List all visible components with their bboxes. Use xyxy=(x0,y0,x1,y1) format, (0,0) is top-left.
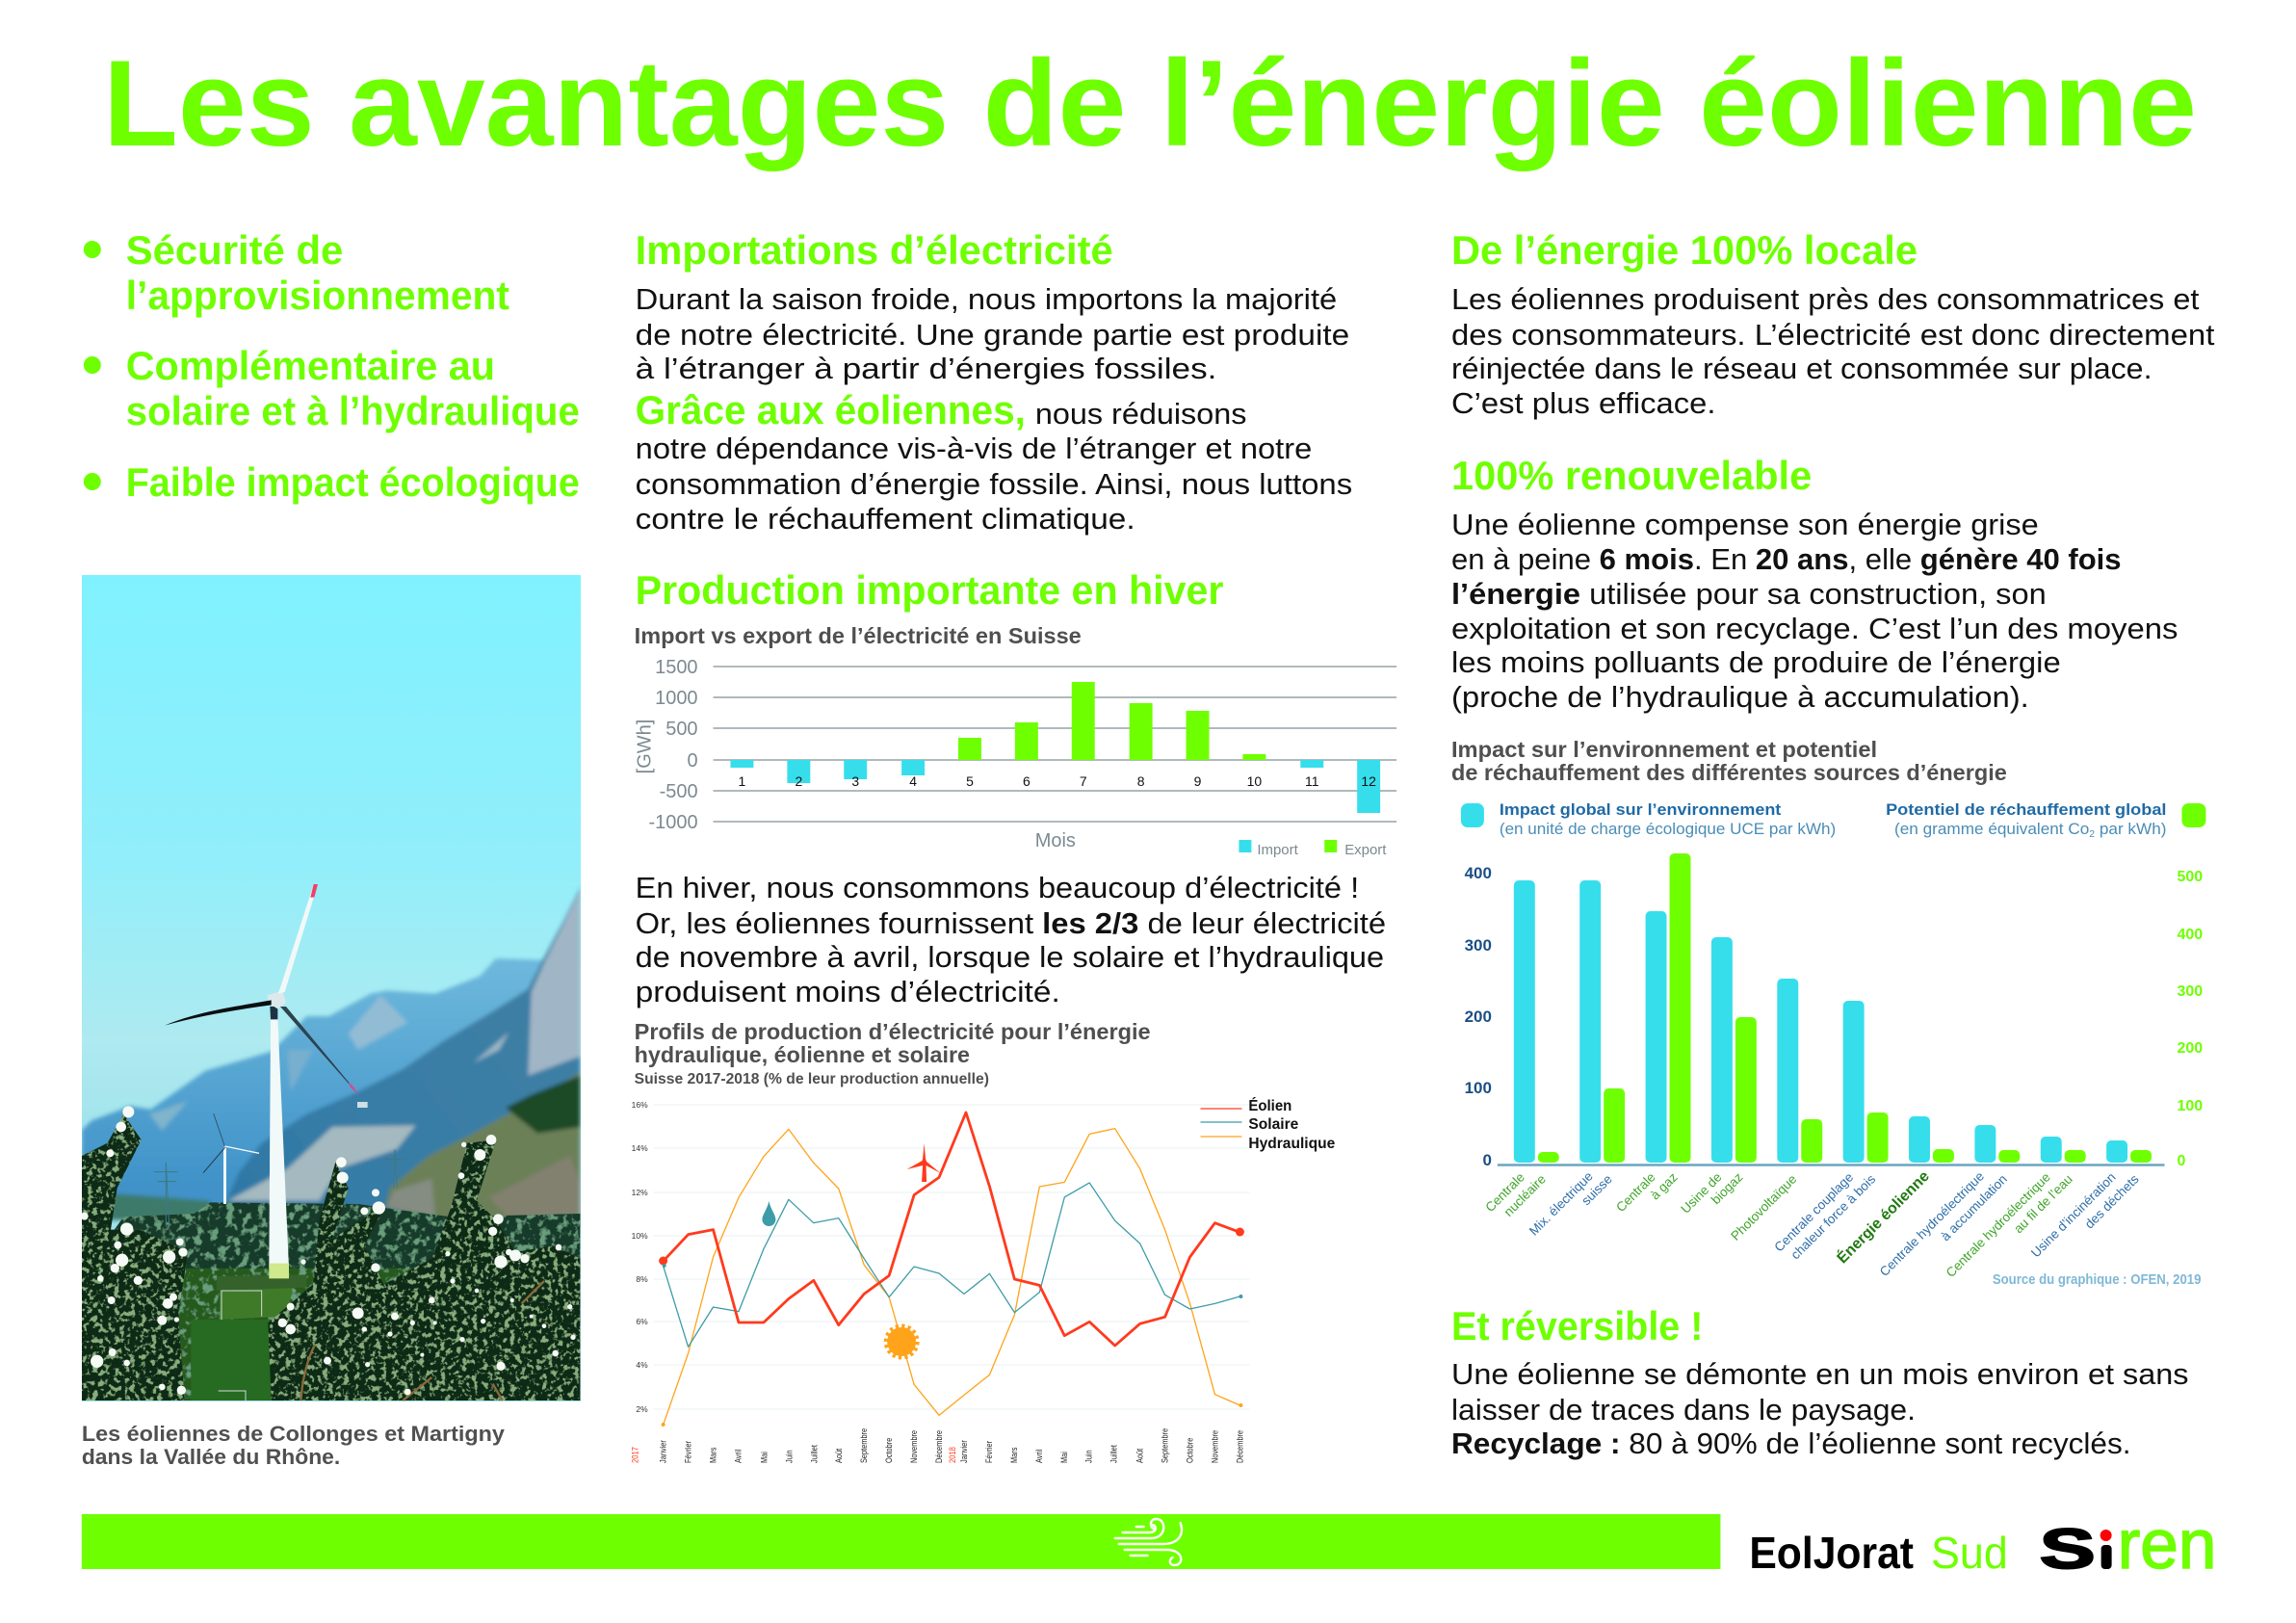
key advantages list: Complémentaire au xyxy=(126,343,495,388)
bar chart: environmental impact: chaleur force à bois xyxy=(1788,1171,1878,1262)
key advantages list: l’approvisionnement xyxy=(126,273,509,318)
line chart: production profiles: 12% xyxy=(632,1188,648,1197)
text block: importations d'électricité: Importations d’électricité xyxy=(636,227,1113,273)
line chart: production profiles: hydraulique, éolienne et solaire xyxy=(635,1042,970,1067)
legend: impact global xyxy=(1461,800,1836,838)
icon: wind xyxy=(1115,1519,1182,1565)
bar chart: import vs export: 8 xyxy=(1137,773,1145,789)
legend: potentiel de réchauffement: (en gramme équivalent Co xyxy=(1894,821,2081,838)
line chart: production profiles: 4% xyxy=(636,1360,648,1370)
text block: énergie locale: C’est plus efficace. xyxy=(1451,386,1715,420)
bar chart: environmental impact: 300 xyxy=(2177,983,2203,1000)
legend: potentiel de réchauffement xyxy=(1886,800,2205,840)
legend: potentiel de réchauffement: 2 xyxy=(2089,829,2096,840)
month labels: Juin xyxy=(783,1450,795,1463)
text block: 100% renouvelable: en à peine 6 mois. En 20 ans, elle génère 40 fois xyxy=(1451,542,2122,576)
month labels: Juillet xyxy=(808,1445,820,1463)
page content xyxy=(82,227,2216,1584)
line chart: production profiles: 2% xyxy=(636,1404,648,1414)
bar chart: environmental impact: Centrale couplage xyxy=(1771,1170,1856,1255)
main turbine xyxy=(165,884,368,1278)
bar chart: environmental impact: 100 xyxy=(1465,1079,1492,1097)
bar chart: environmental impact: Énergie éolienne xyxy=(1833,1166,1933,1267)
small turbine xyxy=(203,1113,259,1204)
bar chart: import vs export: 6 xyxy=(1023,773,1031,789)
month labels: Octobre xyxy=(1185,1437,1195,1463)
text block: 100% renouvelable xyxy=(1451,453,2178,714)
bar chart: environmental impact: Usine de xyxy=(1678,1170,1725,1217)
key advantages list: Sécurité de xyxy=(126,227,343,273)
bar chart: environmental impact: 100 xyxy=(2177,1098,2203,1114)
photo caption xyxy=(82,1422,506,1469)
month labels: Février xyxy=(683,1441,693,1463)
bar chart: import vs export: 0 xyxy=(687,750,698,772)
month labels: Mars xyxy=(1008,1448,1019,1463)
icon: wind turbine xyxy=(907,1143,941,1182)
legend: impact global: (en unité de charge écologique UCE par kWh) xyxy=(1500,821,1836,838)
bar chart: import vs export: 12 xyxy=(1361,773,1376,789)
text block: importations d'électricité: Durant la saison froide, nous importons la majorité xyxy=(636,282,1337,316)
bar chart: environmental impact: nucléaire xyxy=(1501,1172,1549,1219)
text block: énergie locale: De l’énergie 100% locale xyxy=(1451,227,1918,273)
legend: potentiel de réchauffement: par kWh) xyxy=(2095,821,2166,838)
text block: énergie locale: des consommateurs. L’électricité est donc directement xyxy=(1451,318,2215,352)
month labels: Décembre xyxy=(933,1430,944,1463)
bar chart: import vs export: 4 xyxy=(909,773,917,789)
photo caption: Les éoliennes de Collonges et Martigny xyxy=(82,1422,506,1446)
bar chart: environmental impact: 300 xyxy=(1465,936,1492,955)
series: solaire xyxy=(664,1183,1239,1347)
bar chart: environmental impact: Photovoltaïque xyxy=(1728,1172,1799,1243)
bar chart: environmental impact: Mix. électrique xyxy=(1526,1169,1596,1239)
text block: énergie locale xyxy=(1451,227,2215,420)
legend: impact global: Impact global sur l’environnement xyxy=(1500,800,1782,819)
heading: production importante en hiver: Production importante en hiver xyxy=(636,567,1223,613)
month labels: Septembre xyxy=(858,1428,869,1463)
text block: hiver: Or, les éoliennes fournissent les 2/3 de leur électricité xyxy=(636,906,1386,940)
bar chart: environmental impact: au fil de l’eau xyxy=(2011,1172,2075,1236)
bar chart: import vs export: 9 xyxy=(1194,773,1202,789)
logo: Siren: S xyxy=(2040,1519,2096,1581)
bar chart: environmental impact: Centrale xyxy=(1482,1170,1527,1215)
bar chart: import vs export: Mois xyxy=(1035,830,1076,851)
text block: hiver: de novembre à avril, lorsque le solaire et l’hydraulique xyxy=(636,940,1384,974)
month labels: Novembre xyxy=(1210,1430,1220,1463)
bar chart: environmental impact: Centrale hydroélectrique xyxy=(1944,1170,2053,1280)
bar chart: environmental impact: à gaz xyxy=(1648,1169,1681,1202)
line chart: production profiles: 8% xyxy=(636,1274,648,1284)
bar chart: environmental impact: suisse xyxy=(1578,1172,1615,1208)
legend: potentiel de réchauffement: Potentiel de réchauffement global xyxy=(1886,800,2166,819)
line chart: production profiles: 14% xyxy=(632,1143,648,1153)
bar chart: import vs export: 1 xyxy=(739,773,746,789)
month labels: Mars xyxy=(708,1448,718,1463)
text block: et réversible: Et réversible ! xyxy=(1451,1303,1703,1348)
bar chart: import vs export: Import xyxy=(1257,842,1299,858)
bar chart: import vs export: 11 xyxy=(1305,773,1319,789)
series: hydraulique xyxy=(664,1129,1239,1425)
line chart: production profiles: 16% xyxy=(632,1100,648,1110)
text block: importations d'électricité xyxy=(636,227,1352,536)
bar chart: environmental impact: Centrale hydroélectrique xyxy=(1877,1169,1987,1279)
bar chart: import vs export: 5 xyxy=(966,773,974,789)
bar chart: import vs export: [GWh] xyxy=(635,720,656,773)
icon: sun xyxy=(886,1325,918,1358)
bar chart: environmental impact: 0 xyxy=(1482,1151,1492,1169)
text block: 100% renouvelable: 100% renouvelable xyxy=(1451,453,1812,498)
bar chart: environmental impact: Impact sur l’environnement et potentiel xyxy=(1451,737,1877,762)
bar chart: import vs export: 500 xyxy=(665,719,698,740)
bar chart: environmental impact: 400 xyxy=(1465,864,1492,882)
text block: énergie locale: réinjectée dans le réseau et consommée sur place. xyxy=(1451,352,2152,385)
bar chart: import vs export: 3 xyxy=(851,773,859,789)
legend: Solaire xyxy=(1248,1116,1298,1133)
text block: hiver: En hiver, nous consommons beaucoup d’électricité ! xyxy=(636,871,1359,904)
month labels: Octobre xyxy=(883,1437,894,1463)
bar chart: environmental impact: de réchauffement des différentes sources d’énergie xyxy=(1451,760,2007,785)
text block: hiver: produisent moins d’électricité. xyxy=(636,975,1060,1008)
text block: importations d'électricité: contre le réchauffement climatique. xyxy=(636,502,1135,536)
text block: et réversible xyxy=(1451,1303,2188,1460)
key advantages list: Faible impact écologique xyxy=(126,459,580,505)
line chart: production profiles: 10% xyxy=(632,1231,648,1241)
legend: Éolien xyxy=(1248,1096,1292,1114)
month labels: Juillet xyxy=(1109,1445,1119,1463)
month labels: Mai xyxy=(758,1452,770,1463)
bar chart: environmental impact xyxy=(1451,737,2205,1288)
text block: et réversible: laisser de traces dans le paysage. xyxy=(1451,1393,1916,1427)
text block: 100% renouvelable: exploitation et son recyclage. C’est l’un des moyens xyxy=(1451,612,2178,645)
bar chart: environmental impact: biogaz xyxy=(1709,1169,1746,1207)
legend: Hydraulique xyxy=(1248,1136,1335,1152)
key advantages list xyxy=(84,227,580,505)
key advantages list: solaire et à l’hydraulique xyxy=(126,388,580,433)
bar chart: import vs export: 1500 xyxy=(655,657,698,678)
bar chart: import vs export: 2 xyxy=(795,773,802,789)
bar chart: import vs export: 7 xyxy=(1080,773,1087,789)
text block: et réversible: Recyclage : 80 à 90% de l’éolienne sont recyclés. xyxy=(1451,1427,2131,1460)
month labels: Septembre xyxy=(1160,1428,1170,1463)
bar chart: import vs export: -1000 xyxy=(649,812,698,833)
month labels: Avril xyxy=(733,1450,744,1463)
line chart: production profiles: Suisse 2017-2018 (% de leur production annuelle) xyxy=(635,1071,989,1087)
month labels xyxy=(630,1428,1245,1463)
bar chart: environmental impact: des déchets xyxy=(2082,1171,2142,1232)
month labels: 2017 xyxy=(630,1447,640,1463)
bar chart: environmental impact: 0 xyxy=(2177,1153,2185,1169)
bar chart: import vs export xyxy=(635,623,1396,858)
logo: Siren xyxy=(2040,1506,2216,1584)
month labels: Février xyxy=(983,1441,994,1463)
legend xyxy=(1201,1096,1335,1152)
month labels: Janvier xyxy=(658,1440,668,1463)
bar chart: environmental impact: 400 xyxy=(2177,927,2203,943)
logo: Siren: ren xyxy=(2118,1506,2216,1584)
photo caption: dans la Vallée du Rhône. xyxy=(82,1445,340,1469)
line chart: production profiles: 6% xyxy=(636,1317,648,1326)
text block: énergie locale: Les éoliennes produisent près des consommatrices et xyxy=(1451,282,2200,316)
bar chart: environmental impact: 500 xyxy=(2177,869,2203,885)
month labels: Janvier xyxy=(958,1440,969,1463)
icon: water drop xyxy=(762,1201,775,1226)
text block: et réversible: Une éolienne se démonte en un mois environ et sans xyxy=(1451,1357,2188,1391)
text block: 100% renouvelable: les moins polluants de produire de l’énergie xyxy=(1451,645,2061,679)
text block: 100% renouvelable: Une éolienne compense son énergie grise xyxy=(1451,508,2039,541)
text block: importations d'électricité: Grâce aux éoliennes, xyxy=(636,387,1026,432)
bar chart: environmental impact: 200 xyxy=(1465,1008,1492,1026)
bar chart: import vs export: Import vs export de l’électricité en Suisse xyxy=(635,623,1082,648)
month labels: 2018 xyxy=(947,1447,957,1463)
bar chart: import vs export: 1000 xyxy=(655,688,698,709)
logo: EolJorat Sud: EolJorat xyxy=(1749,1528,1914,1578)
month labels: Mai xyxy=(1058,1452,1069,1463)
line chart: production profiles: Profils de production d’électricité pour l’énergie xyxy=(635,1019,1151,1044)
text block: 100% renouvelable: (proche de l’hydraulique à accumulation). xyxy=(1451,680,2029,714)
photo: wind turbines in the Rhône valley xyxy=(81,575,581,1401)
bar chart: environmental impact: à accumulation xyxy=(1938,1172,2010,1243)
logo: EolJorat Sud: Sud xyxy=(1931,1528,2008,1578)
month labels: Décembre xyxy=(1234,1430,1245,1463)
bar chart: environmental impact: Usine d’incinération xyxy=(2028,1170,2119,1260)
text block: importations d'électricité: consommation d’énergie fossile. Ainsi, nous luttons xyxy=(636,467,1352,501)
month labels: Novembre xyxy=(908,1430,919,1463)
bar chart: import vs export: 10 xyxy=(1247,773,1262,789)
footer bar xyxy=(82,1514,1720,1569)
month labels: Avril xyxy=(1033,1450,1044,1463)
text block: importations d'électricité: notre dépendance vis-à-vis de l’étranger et notre xyxy=(636,432,1312,465)
text block: hiver xyxy=(636,871,1386,1008)
bar chart: environmental impact: 200 xyxy=(2177,1040,2203,1057)
bar chart: environmental impact: Source du graphique : OFEN, 2019 xyxy=(1993,1272,2201,1288)
text block: 100% renouvelable: l’énergie utilisée pour sa construction, son xyxy=(1451,577,2047,611)
month labels: Juin xyxy=(1083,1450,1094,1463)
bar chart: import vs export: -500 xyxy=(660,781,698,802)
text block: importations d'électricité: de notre électricité. Une grande partie est produite xyxy=(636,318,1349,352)
line chart: production profiles xyxy=(630,1019,1335,1463)
month labels: Août xyxy=(833,1448,844,1463)
text block: importations d'électricité: nous réduisons xyxy=(1035,397,1246,431)
month labels: Août xyxy=(1135,1448,1145,1463)
bar chart: import vs export: Export xyxy=(1344,842,1387,858)
bar chart: environmental impact: Centrale xyxy=(1613,1170,1658,1215)
series: éolien xyxy=(664,1113,1239,1346)
flowering branches xyxy=(82,1114,580,1400)
text block: importations d'électricité: à l’étranger à partir d’énergies fossiles. xyxy=(636,352,1216,385)
logo: EolJorat Sud xyxy=(1749,1528,2008,1578)
title: Les avantages de l’énergie éolienne xyxy=(103,35,2197,171)
